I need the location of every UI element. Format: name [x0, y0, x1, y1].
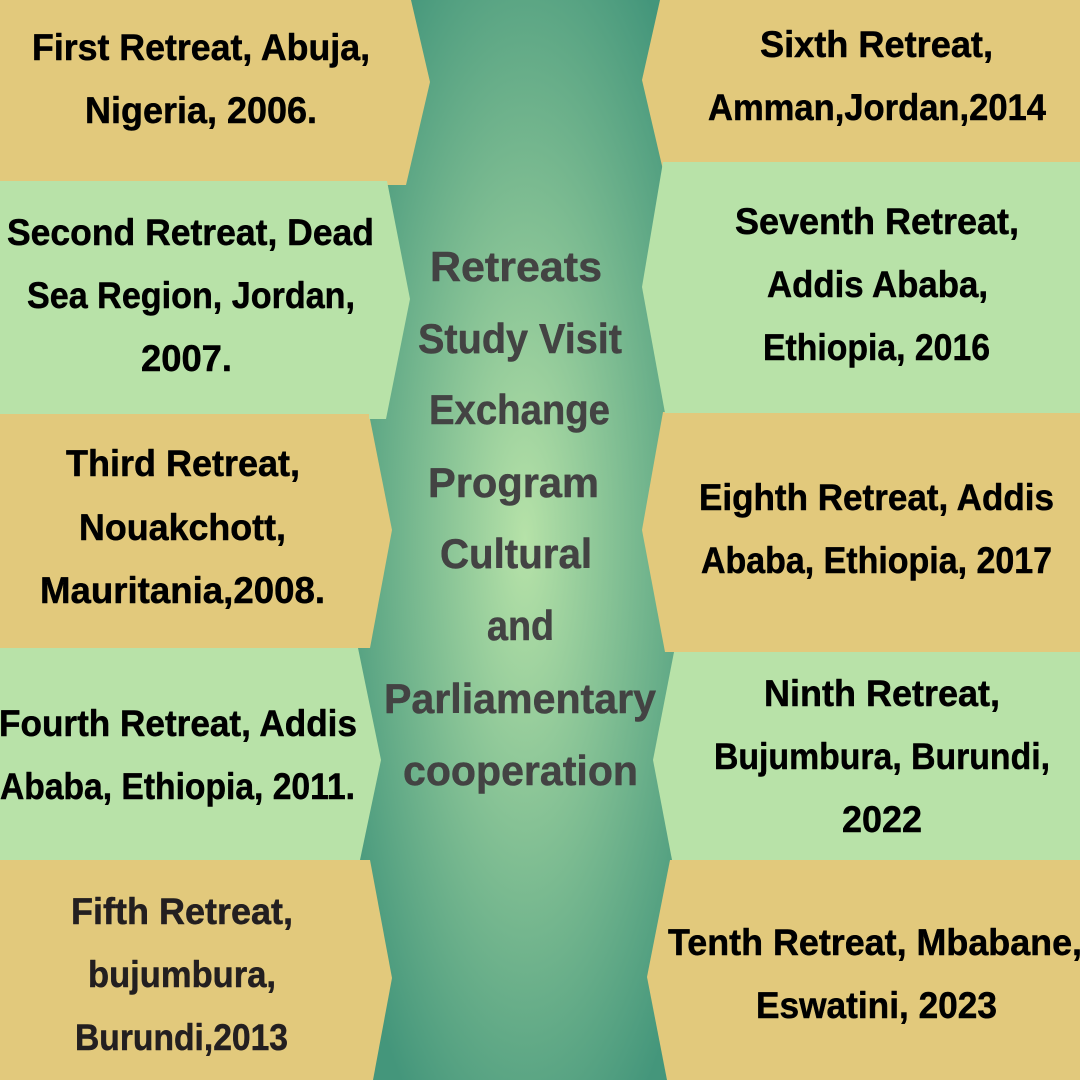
- panel: ninth retreat: [653, 652, 1080, 860]
- panel: sixth retreat: [642, 0, 1080, 170]
- panel: third retreat: Mauritania,2008.: [40, 570, 325, 611]
- panel: sixth retreat: Sixth Retreat,: [760, 24, 993, 65]
- panel: first retreat: First Retreat, Abuja,: [32, 27, 370, 68]
- panel: ninth retreat: 2022: [842, 799, 922, 840]
- panel: fifth retreat: Burundi,2013: [75, 1017, 288, 1058]
- panel: eighth retreat: Eighth Retreat, Addis: [699, 477, 1054, 518]
- panel: fifth retreat: [0, 860, 392, 1080]
- panel: seventh retreat: Addis Ababa,: [767, 264, 988, 305]
- panel: second retreat: 2007.: [141, 338, 232, 379]
- central heading text: and: [487, 602, 554, 649]
- panel: second retreat: Sea Region, Jordan,: [27, 275, 355, 316]
- panel: third retreat: Nouakchott,: [79, 507, 286, 548]
- panel: first retreat: Nigeria, 2006.: [85, 90, 317, 131]
- panel: eighth retreat: [642, 412, 1080, 652]
- panel: tenth retreat: [647, 860, 1080, 1080]
- panel: fourth retreat: Fourth Retreat, Addis: [0, 703, 357, 744]
- panel: second retreat: Second Retreat, Dead: [7, 212, 374, 253]
- panel: eighth retreat: Ababa, Ethiopia, 2017: [701, 540, 1052, 581]
- panel: seventh retreat: Seventh Retreat,: [735, 201, 1019, 242]
- panel: fourth retreat: [0, 648, 381, 860]
- central heading text: Exchange: [429, 386, 610, 433]
- central heading text: Study Visit: [418, 315, 622, 362]
- panel: sixth retreat: Amman,Jordan,2014: [708, 87, 1046, 128]
- panel: third retreat: Third Retreat,: [66, 443, 300, 484]
- panel: tenth retreat: Eswatini, 2023: [756, 985, 997, 1026]
- central heading text: Program: [428, 459, 599, 506]
- central heading text: [384, 243, 657, 794]
- panel: ninth retreat: Ninth Retreat,: [764, 673, 1000, 714]
- panel: fourth retreat: Ababa, Ethiopia, 2011.: [0, 766, 355, 807]
- central heading text: Cultural: [440, 530, 592, 577]
- panel: seventh retreat: [642, 162, 1080, 413]
- panel: fifth retreat: bujumbura,: [88, 954, 276, 995]
- panel: ninth retreat: Bujumbura, Burundi,: [714, 736, 1050, 777]
- central heading text: Retreats: [430, 243, 602, 290]
- central heading text: cooperation: [403, 747, 638, 794]
- panel: seventh retreat: Ethiopia, 2016: [763, 327, 990, 368]
- panel: third retreat: [0, 414, 392, 648]
- panel: first retreat: [0, 0, 430, 185]
- panel: fifth retreat: Fifth Retreat,: [71, 891, 293, 932]
- panel: second retreat: [0, 181, 410, 419]
- central heading text: Parliamentary: [384, 675, 657, 722]
